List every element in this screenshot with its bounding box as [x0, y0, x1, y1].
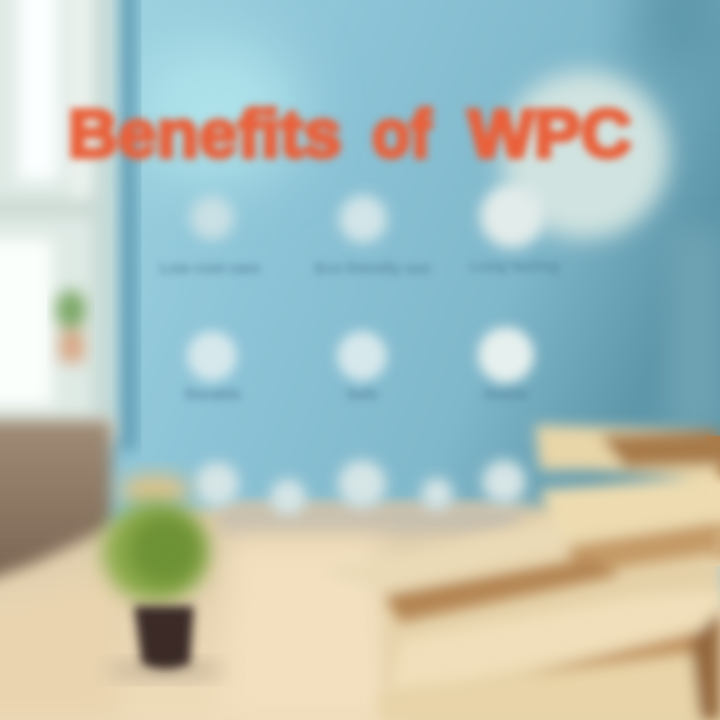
label five: Safe — [346, 386, 378, 403]
icon: benefit four — [187, 331, 237, 381]
icon: benefit one — [190, 196, 234, 240]
floor — [0, 610, 720, 720]
label two: Eco friendly use — [315, 260, 431, 277]
title: Benefits — [68, 96, 342, 172]
label six: Stable — [483, 386, 528, 403]
label three: Long lasting — [470, 258, 560, 275]
title: of — [372, 96, 431, 172]
icon: benefit five — [337, 331, 387, 381]
small window plant — [56, 290, 86, 362]
title — [64, 96, 636, 172]
title: WPC — [468, 96, 631, 172]
icon: benefit two — [339, 195, 387, 243]
icon: benefit three — [480, 184, 544, 248]
label one: Low cost care — [160, 260, 260, 277]
window — [0, 0, 116, 440]
label four: Durable — [185, 386, 241, 403]
window sill — [0, 420, 112, 600]
icon: benefit six — [478, 327, 534, 383]
blue wall — [100, 0, 720, 540]
